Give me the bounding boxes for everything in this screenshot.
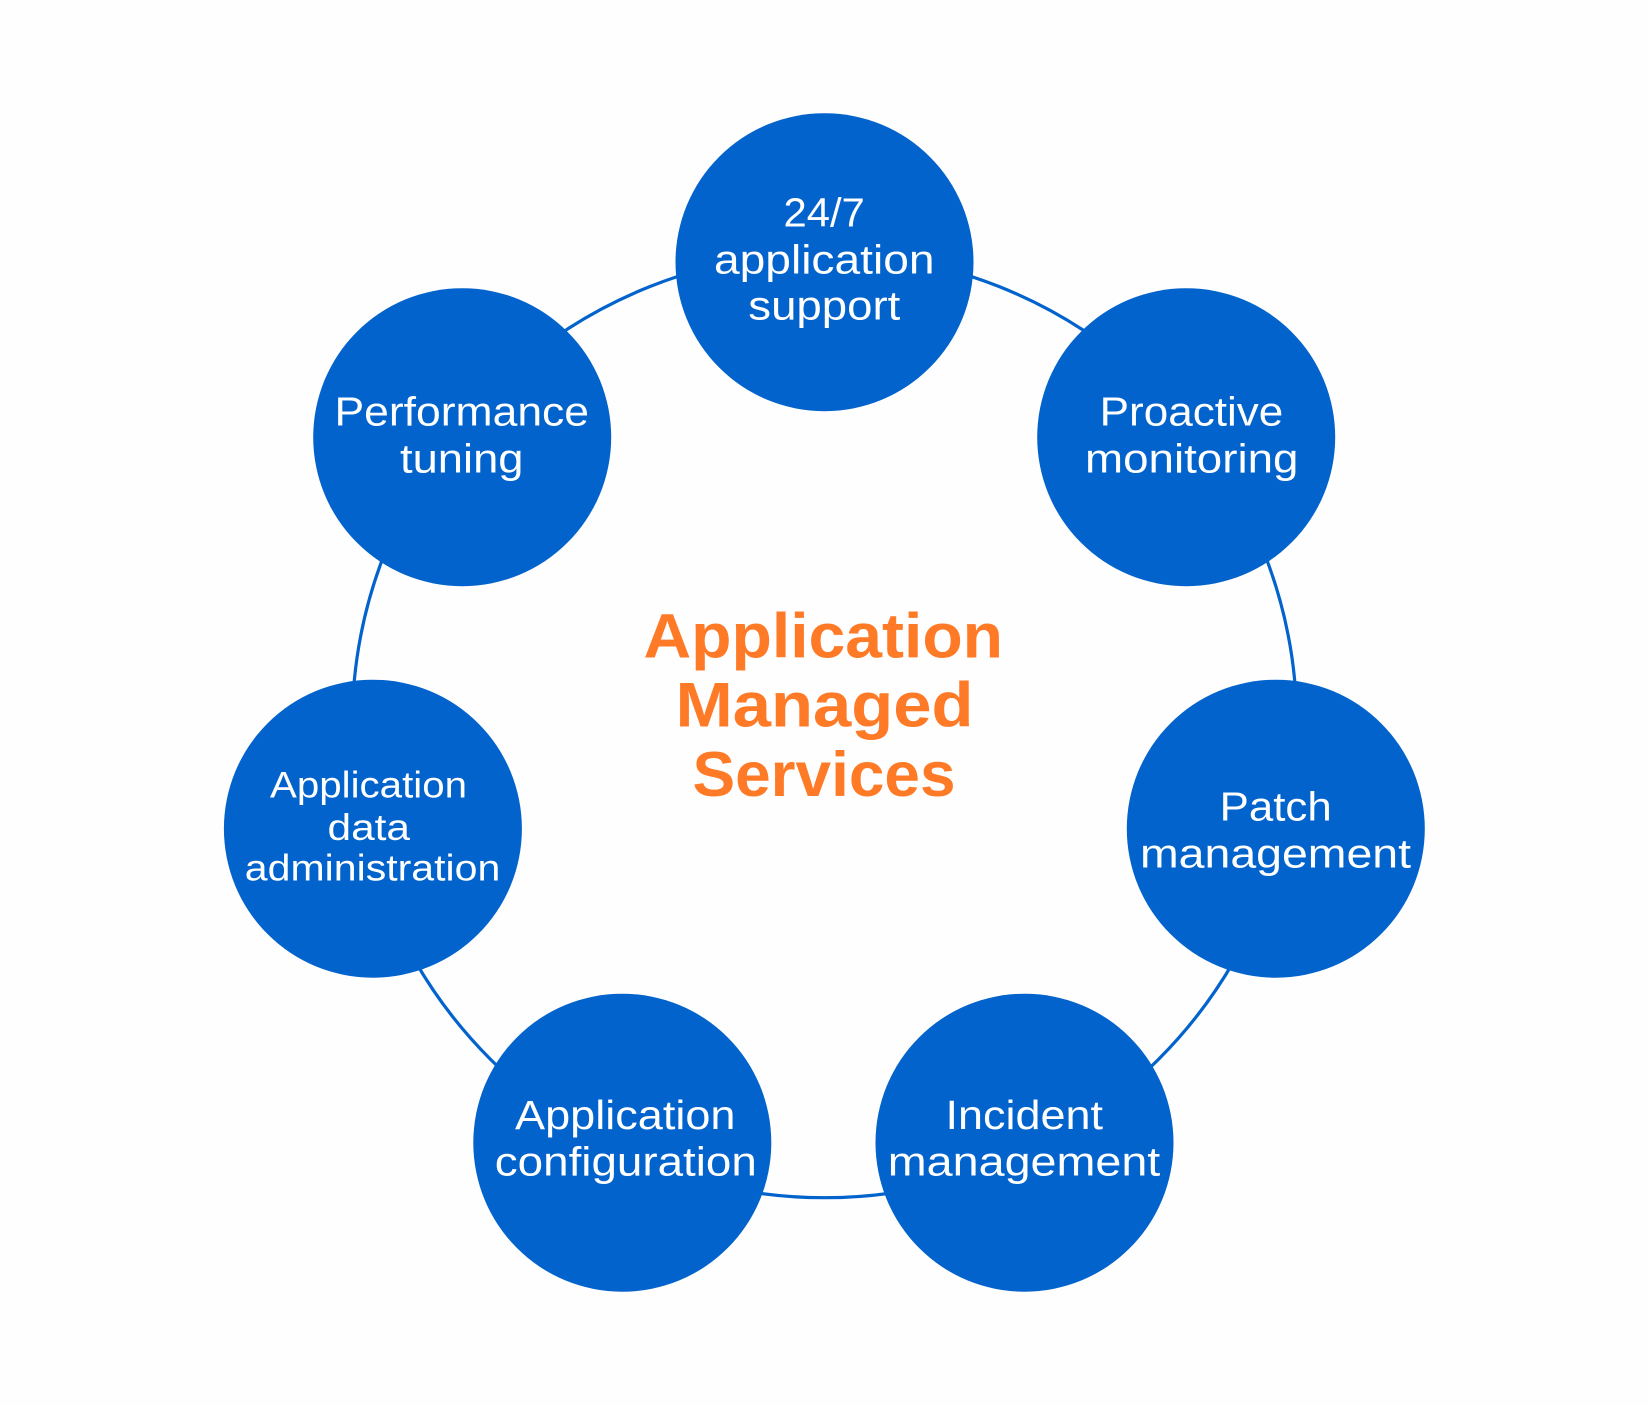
connecting ring bbox=[352, 253, 1297, 1198]
node: incident management bbox=[876, 994, 1174, 1292]
node: patch management: management bbox=[1140, 830, 1412, 876]
node: application data administration: data bbox=[328, 806, 410, 848]
node: application data administration: administration bbox=[245, 847, 500, 889]
node: 24/7 application support: 24/7 bbox=[784, 190, 865, 236]
node: performance tuning bbox=[313, 288, 611, 586]
node: application configuration: configuration bbox=[495, 1139, 757, 1185]
node: application configuration: Application bbox=[515, 1092, 736, 1138]
center title bbox=[644, 602, 1003, 810]
node: 24/7 application support: application bbox=[714, 236, 934, 282]
node: performance tuning: Performance bbox=[334, 389, 589, 435]
center title: Managed bbox=[676, 671, 974, 741]
node: 24/7 application support bbox=[676, 113, 974, 411]
node: incident management: management bbox=[888, 1139, 1161, 1185]
node: patch management: Patch bbox=[1220, 784, 1332, 830]
node: proactive monitoring: Proactive bbox=[1100, 389, 1283, 435]
node: 24/7 application support: support bbox=[748, 282, 901, 328]
node: application data administration: Application bbox=[270, 763, 467, 805]
node: application configuration bbox=[473, 994, 771, 1292]
center title: Services bbox=[692, 740, 956, 810]
node: proactive monitoring: monitoring bbox=[1085, 435, 1298, 481]
node: application data administration bbox=[224, 680, 522, 978]
node: patch management bbox=[1127, 680, 1425, 978]
node: performance tuning: tuning bbox=[400, 435, 524, 481]
node: incident management: Incident bbox=[946, 1092, 1104, 1138]
center title: Application bbox=[644, 602, 1003, 672]
node: proactive monitoring bbox=[1037, 288, 1335, 586]
